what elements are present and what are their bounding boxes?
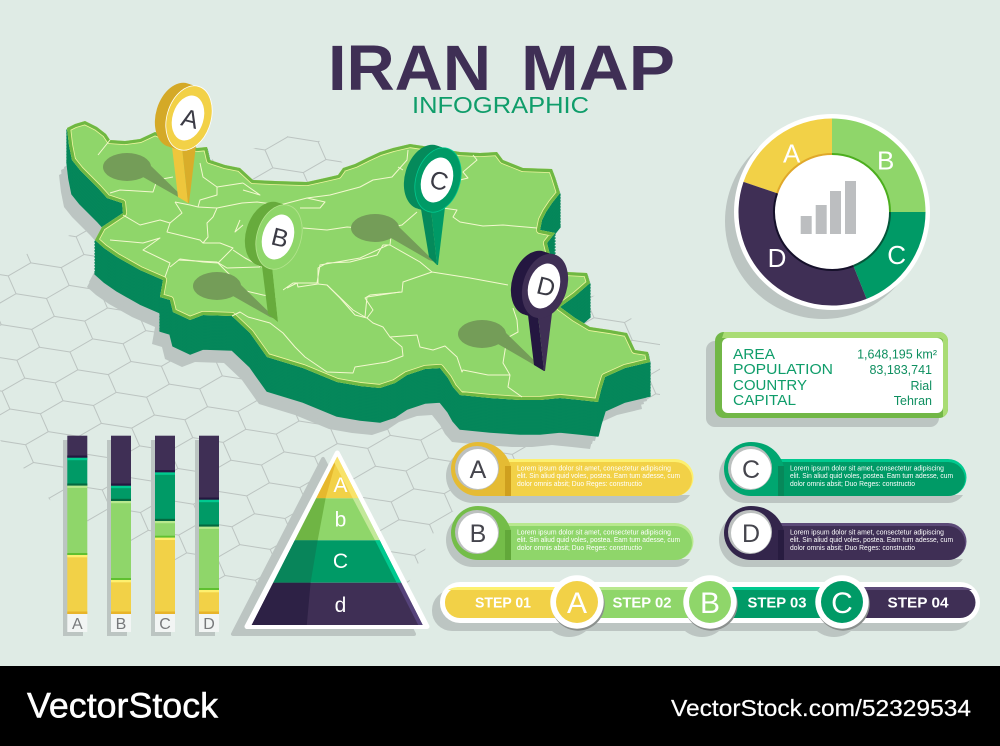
info card B: B: [470, 520, 486, 548]
map pin C: C: [427, 165, 451, 197]
fact values: Rial: [910, 379, 932, 393]
info card C: [719, 442, 967, 503]
map pin A: A: [178, 104, 202, 135]
pin shadows on map: [103, 153, 542, 368]
title: [328, 32, 675, 118]
fact values: 83,183,741: [869, 363, 932, 377]
stacked bar C: C: [159, 616, 171, 633]
step 04 segment: STEP 04: [888, 596, 948, 612]
donut chart: [725, 114, 930, 319]
map pin A: [147, 77, 220, 203]
card text: dolor omnis absit; Duo Reges: constructio: [790, 479, 915, 488]
isometric map of Iran: [59, 121, 650, 449]
donut letters: B: [877, 145, 894, 175]
stacked bar B: [107, 436, 131, 636]
info card C: C: [742, 456, 760, 484]
fact labels: COUNTRY: [733, 377, 807, 394]
stacked bar A: [63, 436, 87, 636]
pyramid letters: b: [335, 509, 346, 532]
fact values: Tehran: [894, 394, 932, 408]
card text: [517, 528, 680, 552]
step marker C: C: [831, 587, 853, 620]
step marker B: [683, 575, 738, 631]
card text: Lorem ipsum dolor sit amet, consectetur adipiscing: [517, 464, 671, 472]
card text: Lorem ipsum dolor sit amet, consectetur adipiscing: [790, 464, 944, 472]
card text: elit. Sin aliud quid voles, postea. Eam tum adesse, cum: [790, 535, 953, 544]
pyramid letters: d: [335, 594, 346, 617]
info card A: A: [470, 456, 487, 484]
stacked bar A: A: [72, 616, 83, 633]
step 03 segment: STEP 03: [748, 596, 806, 612]
step 03 segment: [705, 587, 840, 618]
pyramid letters: C: [333, 550, 348, 573]
title: INFOGRAPHIC: [412, 92, 589, 118]
step 02 segment: [580, 587, 705, 618]
step marker C: [815, 575, 870, 631]
stacked bar B: B: [116, 616, 126, 633]
map pin C: [396, 139, 469, 265]
step marker A: [550, 575, 605, 631]
pyramid letters: [333, 474, 348, 617]
card text: elit. Sin aliud quid voles, postea. Eam tum adesse, cum: [517, 471, 680, 480]
card text: elit. Sin aliud quid voles, postea. Eam tum adesse, cum: [790, 471, 953, 480]
map pin B: [237, 196, 310, 322]
step marker A: A: [567, 587, 587, 620]
card text: dolor omnis absit; Duo Reges: constructio: [517, 543, 642, 552]
hexagon grid backdrop: [0, 82, 926, 622]
step 02 segment: STEP 02: [612, 596, 672, 612]
info card D: [719, 506, 967, 567]
donut letters: C: [887, 240, 906, 270]
info card A: [446, 442, 694, 503]
donut letters: D: [768, 243, 786, 273]
fact labels: POPULATION: [733, 361, 833, 378]
title: MAP: [521, 32, 675, 104]
bar icon: [801, 181, 856, 234]
card text: [790, 528, 953, 552]
info card B: [446, 506, 694, 567]
stacked bar C: [151, 436, 175, 636]
watermark footer: VectorStock.com/52329534: [671, 695, 971, 721]
map pin D: [503, 245, 576, 371]
country facts panel: [706, 332, 948, 427]
stacked bar D: [195, 436, 219, 636]
pyramid letters: A: [333, 474, 348, 497]
province borders: [98, 140, 537, 397]
card text: Lorem ipsum dolor sit amet, consectetur adipiscing: [790, 528, 944, 536]
stacked bar D: D: [203, 616, 215, 633]
donut letters: A: [783, 139, 801, 169]
info card D: D: [742, 520, 760, 548]
fact values: 1,648,195 km²: [857, 348, 937, 362]
fact labels: AREA: [733, 346, 775, 363]
map pin B: B: [268, 223, 291, 254]
card text: [790, 464, 953, 488]
fact labels: [733, 346, 833, 409]
step 04 segment: [840, 587, 976, 618]
card text: elit. Sin aliud quid voles, postea. Eam tum adesse, cum: [517, 535, 680, 544]
card text: dolor omnis absit; Duo Reges: constructio: [517, 479, 642, 488]
fact labels: CAPITAL: [733, 392, 796, 409]
step progress bar: [432, 575, 980, 637]
fact values: [857, 348, 937, 408]
card text: dolor omnis absit; Duo Reges: constructio: [790, 543, 915, 552]
step 01 segment: STEP 01: [475, 596, 531, 612]
step marker B: B: [700, 587, 720, 620]
step 01 segment: [445, 587, 580, 618]
map pin D: D: [534, 271, 558, 303]
donut segments: [739, 118, 926, 306]
watermark footer: [0, 666, 1000, 746]
watermark footer: VectorStock: [27, 686, 219, 726]
title: IRAN: [328, 32, 491, 104]
card text: [517, 464, 680, 488]
card text: Lorem ipsum dolor sit amet, consectetur adipiscing: [517, 528, 671, 536]
pyramid chart: [233, 450, 430, 634]
donut letters: [768, 139, 906, 273]
